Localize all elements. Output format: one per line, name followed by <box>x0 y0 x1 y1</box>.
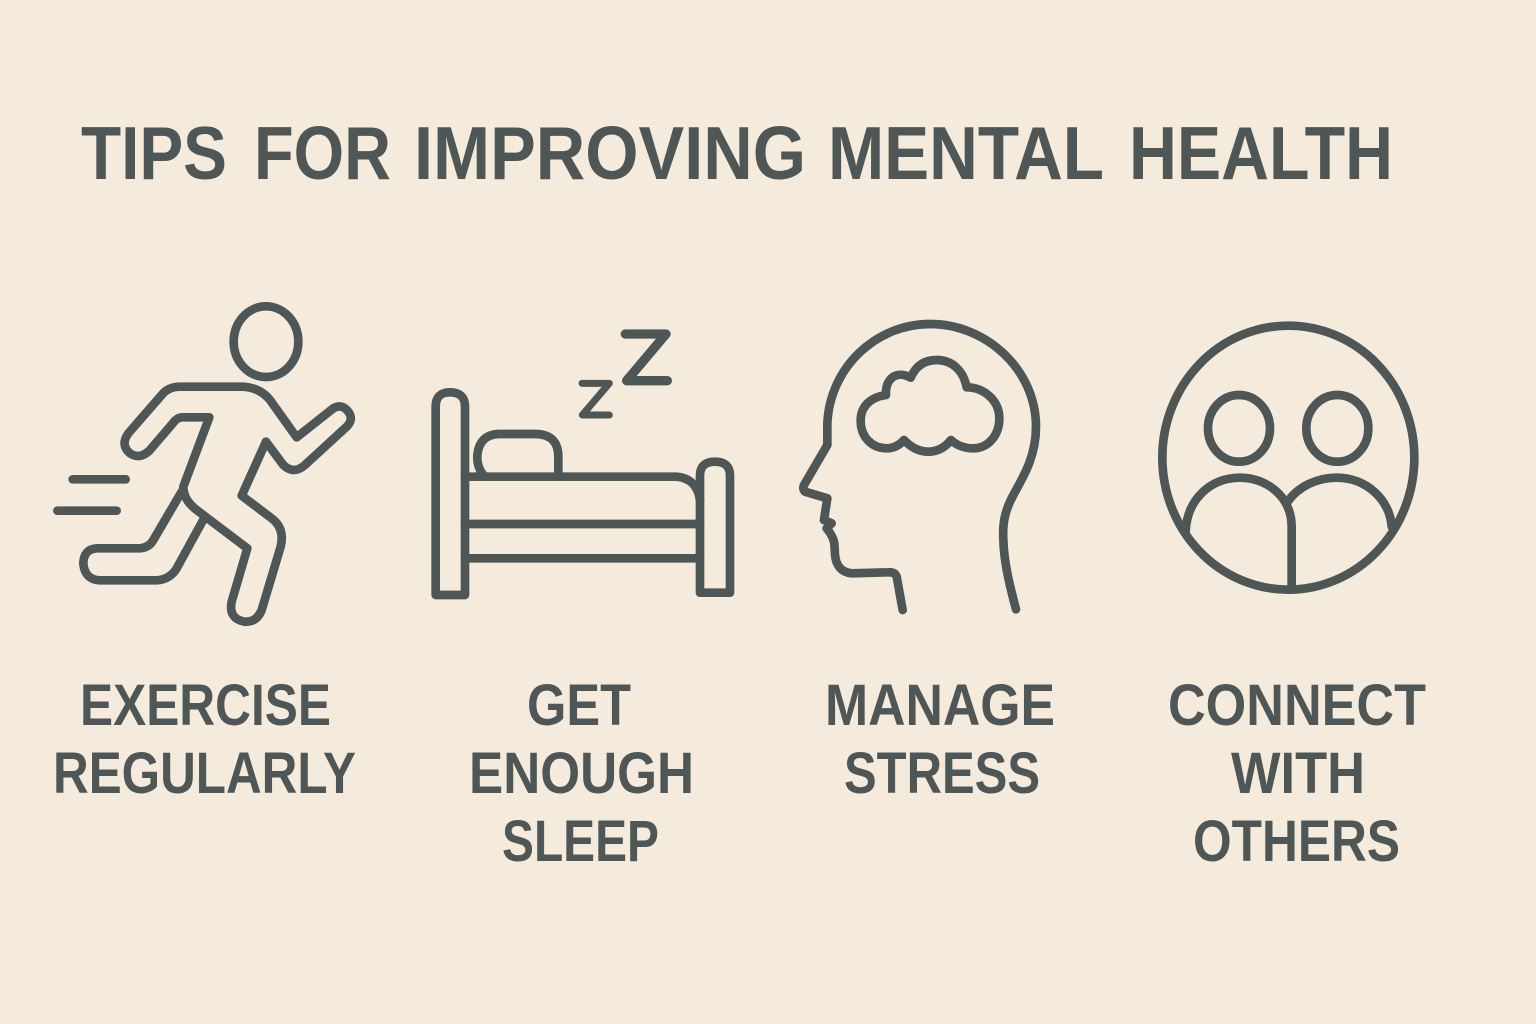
label: manage stress: MANAGE <box>825 673 1055 738</box>
title: HEALTH <box>1129 111 1393 195</box>
title: FOR <box>254 111 391 195</box>
title: MENTAL <box>828 111 1104 195</box>
label: get enough sleep <box>469 673 694 874</box>
title <box>81 111 1393 195</box>
panel: manage stress <box>803 324 1055 806</box>
label: get enough sleep: SLEEP <box>502 809 659 874</box>
title: TIPS <box>81 111 227 195</box>
panel: connect with others <box>1162 326 1426 874</box>
title: IMPROVING <box>414 111 806 195</box>
label: exercise regularly: REGULARLY <box>53 741 356 806</box>
label: connect with others: OTHERS <box>1193 809 1400 874</box>
panel: get enough sleep <box>436 334 730 874</box>
label: connect with others: CONNECT <box>1168 673 1426 738</box>
label: get enough sleep: ENOUGH <box>469 741 694 806</box>
label: connect with others: WITH <box>1231 741 1365 806</box>
label: exercise regularly: EXERCISE <box>80 673 331 738</box>
label: exercise regularly <box>53 673 356 806</box>
label: manage stress: STRESS <box>844 741 1040 806</box>
icon: two people in a circle <box>1162 326 1414 590</box>
icon: head with cloud <box>803 324 1036 610</box>
label: connect with others <box>1168 673 1426 874</box>
icon: bed with z letters <box>436 334 730 595</box>
icon: running person <box>57 306 351 622</box>
label: manage stress <box>825 673 1055 806</box>
panel: exercise regularly <box>53 306 356 806</box>
label: get enough sleep: GET <box>527 673 631 738</box>
